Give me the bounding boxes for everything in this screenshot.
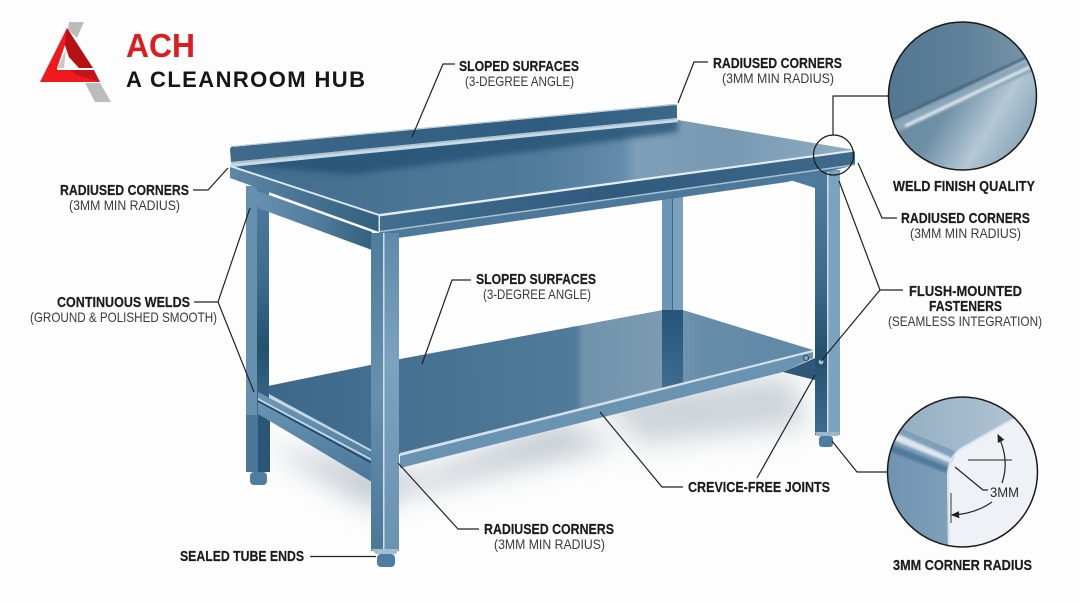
callout: radiused corners left: (3MM MIN RADIUS) bbox=[69, 197, 180, 213]
front lip bbox=[230, 150, 855, 238]
callout: radiused corners left bbox=[60, 168, 228, 213]
callout: radiused corners bottom bbox=[398, 463, 614, 552]
callout: sloped surfaces top: (3-DEGREE ANGLE) bbox=[465, 73, 574, 89]
logo mark bbox=[40, 22, 111, 102]
callout: crevice-free joints bbox=[600, 375, 830, 496]
backsplash bbox=[230, 104, 678, 166]
callout: continuous welds bbox=[30, 208, 254, 392]
callout: continuous welds: CONTINUOUS WELDS bbox=[57, 294, 190, 311]
callout: sloped surfaces top bbox=[412, 58, 579, 137]
callout: sloped surfaces shelf bbox=[422, 271, 596, 364]
callout: radiused corners left: RADIUSED CORNERS bbox=[60, 182, 189, 199]
right leg bbox=[804, 170, 840, 447]
brand tagline: A CLEANROOM HUB bbox=[126, 67, 365, 92]
callout: radiused corners top right: RADIUSED CORNERS bbox=[713, 55, 842, 72]
dimension marks bbox=[968, 460, 1012, 461]
detail: 3mm corner radius bbox=[832, 395, 1040, 574]
lower shelf bbox=[258, 310, 815, 468]
callout: radiused corners top right bbox=[678, 55, 842, 103]
leader line bbox=[833, 96, 888, 135]
callout: flush-mounted fasteners: (SEAMLESS INTEGRATION) bbox=[888, 313, 1042, 329]
callout: flush-mounted fasteners bbox=[821, 181, 1042, 361]
upper side brace bbox=[255, 190, 372, 250]
callout: sealed tube ends: SEALED TUBE ENDS bbox=[180, 548, 304, 565]
callout: radiused corners right bbox=[858, 163, 1030, 241]
lower side rail bbox=[258, 392, 372, 482]
callout: radiused corners right: RADIUSED CORNERS bbox=[901, 210, 1030, 227]
weld magnifier circle bbox=[889, 22, 1036, 170]
callout: flush-mounted fasteners: FASTENERS bbox=[929, 298, 1002, 315]
callout: radiused corners right: (3MM MIN RADIUS) bbox=[910, 225, 1021, 241]
weld caption: WELD FINISH QUALITY bbox=[893, 178, 1035, 195]
callout: radiused corners top right: (3MM MIN RADIUS) bbox=[722, 70, 834, 86]
stainless steel table bbox=[230, 104, 855, 567]
table top surface bbox=[230, 119, 855, 215]
callout: flush-mounted fasteners: FLUSH-MOUNTED bbox=[909, 283, 1022, 300]
upper right brace bbox=[787, 172, 815, 188]
corner magnifier circle bbox=[885, 395, 1040, 550]
callout: continuous welds: (GROUND & POLISHED SMOOTH) bbox=[30, 309, 217, 325]
leader line bbox=[832, 441, 888, 472]
detail: weld finish quality bbox=[814, 20, 1040, 195]
callout: radiused corners bottom: RADIUSED CORNERS bbox=[484, 521, 614, 538]
rear leg bbox=[662, 190, 683, 315]
callout: radiused corners bottom: (3MM MIN RADIUS) bbox=[494, 536, 605, 552]
front leg bbox=[371, 233, 399, 567]
callout: sloped surfaces shelf: (3-DEGREE ANGLE) bbox=[483, 286, 591, 302]
logo bbox=[40, 22, 365, 102]
corner magnifier circle: 3MM bbox=[990, 484, 1019, 500]
callout: crevice-free joints: CREVICE-FREE JOINTS bbox=[688, 479, 830, 496]
corner caption: 3MM CORNER RADIUS bbox=[893, 557, 1032, 574]
leader ring on table corner bbox=[814, 135, 854, 175]
floor shadow bbox=[265, 375, 810, 510]
brand name: ACH bbox=[126, 27, 195, 64]
rear left leg bbox=[246, 186, 270, 485]
callout: sloped surfaces top: SLOPED SURFACES bbox=[459, 58, 579, 75]
callout: sloped surfaces shelf: SLOPED SURFACES bbox=[476, 271, 596, 288]
